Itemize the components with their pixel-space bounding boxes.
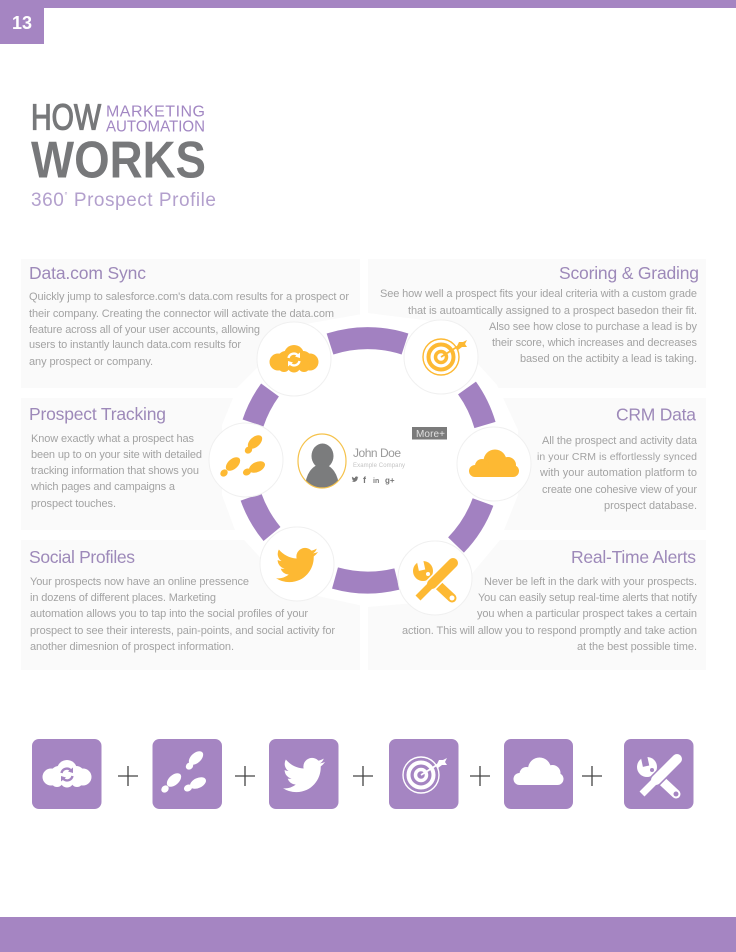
panel: Social Profiles: prospect to see their interests, pain-points, and social activity for xyxy=(30,625,335,637)
title xyxy=(31,96,216,211)
panel: Data.com Sync: users to instantly launch data.com results for xyxy=(29,339,241,351)
icon tile: sync cloud xyxy=(32,739,102,809)
title: ° xyxy=(64,191,68,200)
icon tile: cloud xyxy=(504,739,573,809)
social icons xyxy=(352,475,395,485)
center profile card: John Doe xyxy=(353,446,401,460)
panel: Social Profiles xyxy=(21,540,360,670)
plus xyxy=(353,766,373,786)
plus xyxy=(118,766,138,786)
social icons: g+ xyxy=(385,476,395,485)
panel: Social Profiles: Social Profiles xyxy=(29,547,135,567)
panel: Scoring & Grading: their score, which increases and decreases xyxy=(492,337,698,349)
title: WORKS xyxy=(31,132,206,190)
plus xyxy=(470,766,490,786)
center profile card: Example Company xyxy=(353,463,405,469)
panel: Scoring & Grading xyxy=(368,259,706,388)
panel: Scoring & Grading: based on the actibity a lead is taking. xyxy=(520,353,697,365)
panel: Social Profiles: automation allows you to tap into the social profiles of your xyxy=(30,608,308,620)
panel: CRM Data: All the prospect and activity data xyxy=(542,435,698,447)
node: tools xyxy=(398,541,472,615)
node: sync cloud xyxy=(257,322,331,396)
node: twitter bird xyxy=(260,527,334,601)
panel: Scoring & Grading: Scoring & Grading xyxy=(559,263,699,283)
panel: Social Profiles: Your prospects now have an online pressence xyxy=(30,576,249,588)
icon tile: target xyxy=(389,739,458,809)
panel: Prospect Tracking: been up to on your site with detailed xyxy=(31,449,202,461)
panel: Real-Time Alerts xyxy=(368,540,706,670)
node: target xyxy=(404,320,478,394)
purple ring segments xyxy=(251,338,485,583)
panel: Social Profiles: another dimesnion of prospect information. xyxy=(30,641,234,653)
panel: Real-Time Alerts: at the best possible time. xyxy=(577,641,697,653)
panel: Data.com Sync: feature across all of your user accounts, allowing xyxy=(29,324,260,336)
panel: Data.com Sync: any prospect or company. xyxy=(29,356,153,368)
page number tab: 13 xyxy=(12,13,32,33)
social icons: in xyxy=(373,478,379,485)
social icons: f xyxy=(363,475,367,485)
center profile card xyxy=(297,433,405,489)
node: footsteps xyxy=(209,423,283,497)
icon tile: tools xyxy=(624,739,694,809)
plus xyxy=(582,766,602,786)
title: AUTOMATION xyxy=(106,118,205,136)
icon tile: twitter bird xyxy=(269,739,338,809)
top bar xyxy=(0,0,736,8)
panel: CRM Data: CRM Data xyxy=(616,404,696,424)
title: 360 xyxy=(31,190,64,211)
panel: Data.com Sync: Quickly jump to salesforce.com's data.com results for a prospect or xyxy=(29,291,349,303)
footer bar xyxy=(0,917,736,952)
title: HOW xyxy=(31,96,101,138)
panel: Prospect Tracking: which pages and campaigns a xyxy=(30,481,176,493)
panel: Scoring & Grading: Also see how close to purchase a lead is by xyxy=(489,321,698,333)
panel: CRM Data xyxy=(505,398,706,530)
panel: Data.com Sync: their company. Creating the connector will activate the data.com xyxy=(29,308,334,320)
panel: Real-Time Alerts: Real-Time Alerts xyxy=(571,547,696,567)
panel: Real-Time Alerts: Never be left in the dark with your prospects. xyxy=(484,576,697,588)
title: Prospect Profile xyxy=(68,190,216,211)
panel: Scoring & Grading: that is autoamtically assigned to a prospect basedon their fit. xyxy=(408,305,697,317)
panel: Social Profiles: in dozens of different places. Marketing xyxy=(30,592,216,604)
avatar xyxy=(297,433,347,489)
panel: Real-Time Alerts: you when a particular prospect takes a certain xyxy=(477,608,697,620)
panel: Scoring & Grading: See how well a prospect fits your ideal criteria with a custom grade xyxy=(380,288,697,300)
panel: CRM Data: create one cohesive view of your xyxy=(542,484,697,496)
panel: Prospect Tracking xyxy=(21,398,230,530)
node: cloud xyxy=(457,427,531,501)
more button: More+ xyxy=(416,429,445,440)
panel: CRM Data: prospect database. xyxy=(604,500,697,512)
panel: CRM Data: with your automation platform to xyxy=(539,467,697,479)
panel: Prospect Tracking: tracking information that shows you xyxy=(31,465,199,477)
title: MARKETING xyxy=(106,104,205,120)
panel: Real-Time Alerts: You can easily setup real-time alerts that notify xyxy=(478,592,698,604)
panel: Prospect Tracking: prospect touches. xyxy=(31,498,116,510)
panel: Data.com Sync: Data.com Sync xyxy=(29,263,146,283)
icon tile: footsteps xyxy=(152,739,222,809)
panel backgrounds and ring halo xyxy=(21,259,706,670)
panel: Prospect Tracking: Prospect Tracking xyxy=(29,404,166,424)
panel: CRM Data: in your CRM is effortlessly synced xyxy=(537,451,697,463)
panel: Data.com Sync xyxy=(21,259,360,388)
plus xyxy=(235,766,255,786)
panel: Prospect Tracking: Know exactly what a prospect has xyxy=(31,433,194,445)
page number tab xyxy=(0,0,44,44)
panel: Real-Time Alerts: action. This will allow you to respond promptly and take action xyxy=(402,625,697,637)
